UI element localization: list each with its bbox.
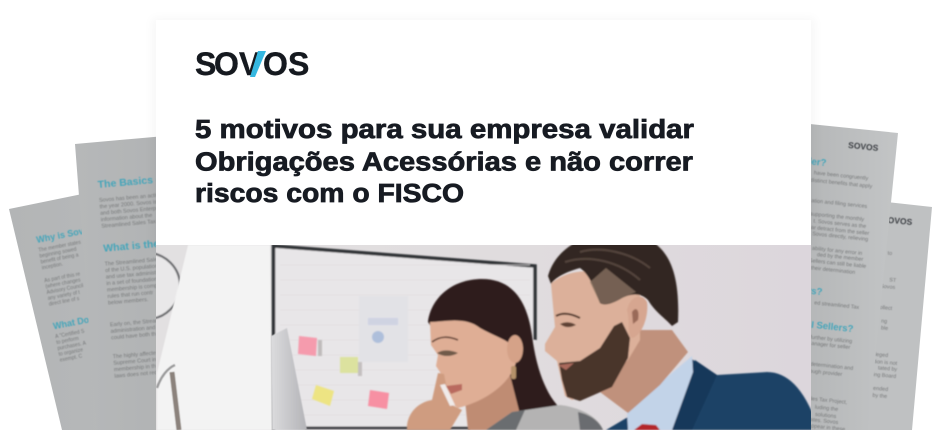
text: front left page copy: Early on, the Stream [110, 318, 161, 328]
text: front left page copy: below members. [108, 297, 149, 307]
woman's ear and earring [507, 335, 523, 363]
text: front right page copy: ales Tax Project, [808, 396, 848, 406]
text: front right page copy: have been congruently [814, 170, 869, 182]
text: back left page copy: any variety of t [47, 290, 81, 302]
text: back left page copy: (where changes [45, 277, 82, 290]
man's hair [548, 240, 678, 326]
held document [271, 328, 307, 430]
text: front right page copy: ough provider [809, 369, 843, 378]
text: back right page copy: ST [889, 277, 897, 284]
text: front left page copy: The Basics of [97, 173, 167, 191]
text: back left page copy: Advisory Council [46, 283, 84, 296]
man's beard [559, 322, 630, 401]
text: front left page copy: What is the [103, 238, 160, 255]
text: front right page copy: their determination [810, 265, 855, 276]
text: back right page copy: SOVOS [882, 214, 913, 227]
man's neck [600, 330, 688, 413]
text: front left page copy: Sovos has been an active [99, 192, 162, 204]
sticky notes [298, 336, 389, 409]
photo: two colleagues at a monitor [114, 240, 812, 430]
text: back right page copy: ng [881, 318, 887, 325]
text: back left page copy: The member states [38, 240, 82, 254]
text: front left page copy [97, 173, 183, 380]
text: front right page copy: supporting the monthly [810, 211, 865, 223]
man's ear [627, 296, 647, 338]
man [545, 240, 812, 430]
pinned paper [367, 317, 399, 344]
text: front right page copy: t. Sovos serves as the [813, 218, 866, 230]
text: back left page copy: to perform [56, 336, 79, 346]
woman's long hair [427, 278, 558, 412]
text: front left page copy: rules that run contr [107, 290, 154, 300]
text: front left page copy: of the U.S. population [105, 264, 158, 274]
title: Obrigações Acessórias e não correr [195, 148, 693, 176]
text: front left page copy: Supreme Court in [113, 357, 157, 367]
man's tie [634, 424, 660, 430]
text: front left page copy: the year 2000. Sovos is [99, 199, 157, 210]
text: back right page copy: to [887, 251, 892, 257]
text: front right page copy: d I Sellers? [802, 319, 854, 335]
text: back left page copy: to organize [58, 347, 84, 358]
text: front left page copy: and use tax administ [106, 270, 157, 281]
text: front right page copy: further by utilizing [810, 335, 852, 345]
text: front left page copy: Streamlined Sales Tax [101, 219, 156, 230]
text: front left page copy: information about the [101, 213, 153, 223]
text: front right page copy: luding the [815, 405, 838, 413]
text: back left page copy: Why is Sovos [35, 224, 95, 245]
text: front left page copy: could have both th [111, 332, 156, 341]
text: back left page copy: exempt. C [59, 353, 83, 364]
text: front right page copy: , Sovos directly, relieving [809, 231, 868, 243]
text: back left page copy: beginning sowed [39, 247, 77, 260]
text: back right page copy: Sovos [880, 284, 896, 291]
text: front right page copy: anager for seller [811, 341, 851, 351]
text: back right page copy [871, 214, 913, 400]
woman's blouse [516, 404, 600, 430]
text: front right page copy: SOVOS [848, 140, 879, 153]
panel: white title card [152, 18, 815, 248]
text: front right page copy: distinct benefits that apply [810, 178, 873, 190]
text: back left page copy: What Do [52, 314, 90, 331]
text: front right page copy: solutions [815, 412, 837, 420]
text: back left page copy [35, 224, 118, 364]
text: back right page copy: ation is not [871, 359, 898, 367]
text: front left page copy: The highly affecte [113, 351, 156, 360]
panel: front right document page [800, 123, 898, 430]
text: back right page copy: by the [872, 393, 887, 400]
panel: back right document page [860, 199, 932, 430]
man's shirt and collar [627, 356, 693, 430]
text: front right page copy: ed streamlined Tax [814, 300, 860, 311]
text: front left page copy: and both Sovos Enterprise [100, 205, 165, 217]
office background wall [156, 245, 811, 430]
text: front left page copy: membership in th [114, 364, 156, 373]
text: front right page copy: ear detract from the seller [808, 225, 870, 237]
woman [407, 279, 603, 430]
title [195, 116, 694, 208]
text: back left page copy: inception. [41, 261, 64, 271]
text: back left page copy: direct line of s [48, 296, 80, 308]
text: back right page copy: tated by [878, 365, 898, 373]
wall planner board [272, 246, 536, 430]
text: back left page copy: As part of this re [44, 271, 81, 284]
text: back right page copy: ing Board [873, 372, 896, 380]
title: 5 motivos para sua empresa validar [195, 116, 694, 144]
text: front left page copy: administration and [110, 325, 156, 335]
panel: back left document page [9, 177, 225, 430]
man's face [545, 271, 640, 400]
wall clock [156, 252, 180, 320]
computer monitor [157, 245, 272, 430]
text: back left page copy: purchases. A [57, 340, 87, 352]
text: front left page copy: laws does not req [114, 370, 158, 380]
text: front right page copy: determination and [810, 362, 853, 372]
text: front left page copy: membership is comp [107, 283, 158, 294]
text: back right page copy: ble [881, 325, 888, 332]
text: front right page copy: ates. Sovos [810, 417, 839, 426]
man's suit jacket [606, 358, 812, 430]
woman's hand [407, 373, 462, 430]
panel: front left document page [75, 136, 183, 430]
text: front left page copy: The Streamlined Sales [104, 257, 161, 268]
text: front right page copy [802, 140, 879, 430]
logo: Sovos: SOVOS [195, 46, 309, 82]
text: front left page copy: in a set of foundation [106, 277, 158, 287]
text: front right page copy: Sellers can still be liable [809, 258, 866, 270]
text: back right page copy: ollect [879, 305, 893, 312]
text: back right page copy: lleged [873, 352, 888, 359]
text: front right page copy: ded by the member [817, 252, 864, 263]
text: front right page copy: der? [805, 156, 827, 169]
text: back right page copy: ended [873, 386, 888, 393]
text: front right page copy: ers? [802, 285, 823, 298]
text: back left page copy: benefit of being a [40, 252, 79, 266]
text: front right page copy: ability for any error in [812, 246, 862, 257]
text: back left page copy: A "Certified S [55, 329, 86, 340]
text: front right page copy: ation and filing services [811, 198, 868, 210]
woman's neck [465, 375, 524, 430]
woman's face [430, 320, 516, 408]
title: riscos com o FISCO [195, 180, 464, 208]
